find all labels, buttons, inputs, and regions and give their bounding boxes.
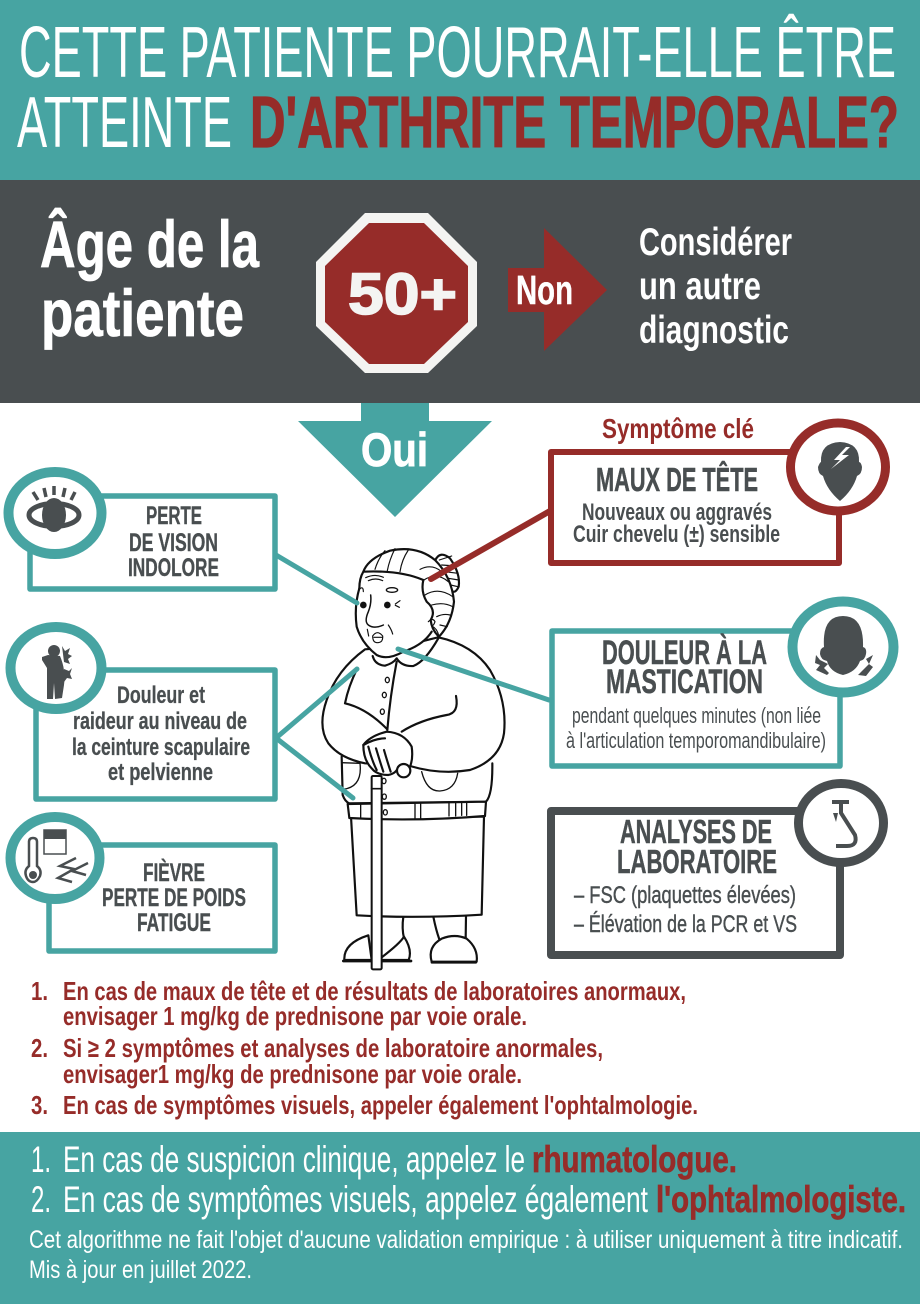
numbered treatment list: Si ≥ 2 symptômes et analyses de laboratoire anormales, (63, 1033, 603, 1063)
icon: head with jaw pain (792, 602, 894, 692)
numbered treatment list: 1. (31, 976, 48, 1006)
numbered treatment list: envisager1 mg/kg de prednisone par voie orale. (63, 1059, 522, 1089)
footer call 1: En cas de suspicion clinique, appelez le (63, 1139, 525, 1180)
text: consider another diagnosis: Considérer (639, 221, 792, 264)
arrow: yes: Oui (361, 423, 428, 476)
panel: fever, weight loss, fatigue (10, 817, 275, 951)
disclaimer (29, 1226, 903, 1284)
text: jaw pain: DOULEUR À LA (602, 634, 767, 672)
heading: age of patient (40, 207, 260, 350)
text: general symptoms: FIÈVRE (143, 858, 205, 887)
arrow: yes (298, 403, 492, 517)
text: consider another diagnosis (639, 221, 792, 352)
icon: eye (8, 472, 102, 554)
arrow: no (508, 228, 607, 351)
text: girdle pain (72, 682, 250, 786)
text: girdle pain: Douleur et (117, 682, 205, 709)
footer call 1: 1. (31, 1139, 51, 1180)
icon: thermometer, scale, fatigue (10, 817, 100, 899)
panel: age question (0, 180, 920, 403)
footer call 2: En cas de symptômes visuels, appelez également (63, 1179, 649, 1220)
footer band (0, 1132, 920, 1304)
text: headache (573, 461, 780, 548)
text: vision loss: DE VISION (129, 529, 218, 557)
text: vision loss: INDOLORE (128, 554, 219, 582)
arrow: no: Non (516, 267, 573, 313)
footer call 1: rhumatologue. (532, 1139, 737, 1180)
text: general symptoms (102, 858, 246, 937)
heading: age of patient: patiente (41, 276, 244, 350)
text: general symptoms: PERTE DE POIDS (102, 884, 246, 912)
text: headache: Nouveaux ou aggravés (582, 499, 772, 526)
text: general symptoms: FATIGUE (137, 909, 211, 937)
illustration: elderly woman with cane (322, 549, 505, 969)
numbered treatment list: En cas de symptômes visuels, appeler également l'ophtalmologie. (63, 1090, 698, 1120)
text: headache: MAUX DE TÊTE (596, 461, 758, 498)
text: vision loss: PERTE (146, 502, 202, 530)
panel: painless vision loss (8, 472, 275, 589)
footer call 2: 2. (31, 1179, 51, 1220)
panel: lab tests (551, 784, 884, 955)
icon: stop sign 50+: 50+ (348, 262, 457, 327)
text: girdle pain: et pelvienne (108, 759, 213, 786)
panel: jaw pain (552, 602, 894, 766)
red connector line (431, 511, 550, 579)
text: lab tests: ANALYSES DE (620, 813, 772, 850)
text: vision loss (128, 502, 219, 582)
text: jaw pain: MASTICATION (606, 663, 763, 701)
numbered treatment list: 3. (31, 1090, 48, 1120)
icon: head with lightning (790, 423, 886, 511)
icon: person with pain (10, 627, 102, 709)
connector lines (276, 555, 549, 798)
numbered treatment list: 2. (31, 1033, 48, 1063)
text: jaw pain: à l'articulation temporomandibulaire) (566, 728, 826, 753)
icon: stop sign 50+ (316, 213, 477, 373)
text: girdle pain: raideur au niveau de (73, 708, 247, 735)
text: girdle pain: la ceinture scapulaire (72, 734, 250, 761)
panel: girdle pain and stiffness (10, 627, 275, 799)
text: jaw pain: pendant quelques minutes (non liée (572, 703, 821, 728)
text: jaw pain (566, 634, 826, 753)
disclaimer: Mis à jour en juillet 2022. (29, 1256, 252, 1284)
panel: headache (551, 423, 886, 563)
header band (0, 0, 920, 180)
text: consider another diagnosis: diagnostic (639, 309, 789, 352)
numbered treatment list: envisager 1 mg/kg de prednisone par voie orale. (63, 1001, 527, 1031)
label: key symptom: Symptôme clé (602, 413, 754, 444)
text: lab tests: – Élévation de la PCR et VS (574, 911, 797, 938)
numbered treatment list (31, 976, 698, 1120)
numbered treatment list: En cas de maux de tête et de résultats de laboratoires anormaux, (63, 976, 686, 1006)
text: headache: Cuir chevelu (±) sensible (573, 521, 780, 548)
text: lab tests: – FSC (plaquettes élevées) (574, 882, 796, 909)
text: lab tests (574, 813, 797, 938)
text: consider another diagnosis: un autre (639, 265, 761, 308)
text: lab tests: LABORATOIRE (617, 843, 777, 880)
icon: flask (798, 784, 884, 862)
heading: age of patient: Âge de la (40, 207, 260, 281)
title line 2: ATTEINTE (17, 83, 232, 163)
